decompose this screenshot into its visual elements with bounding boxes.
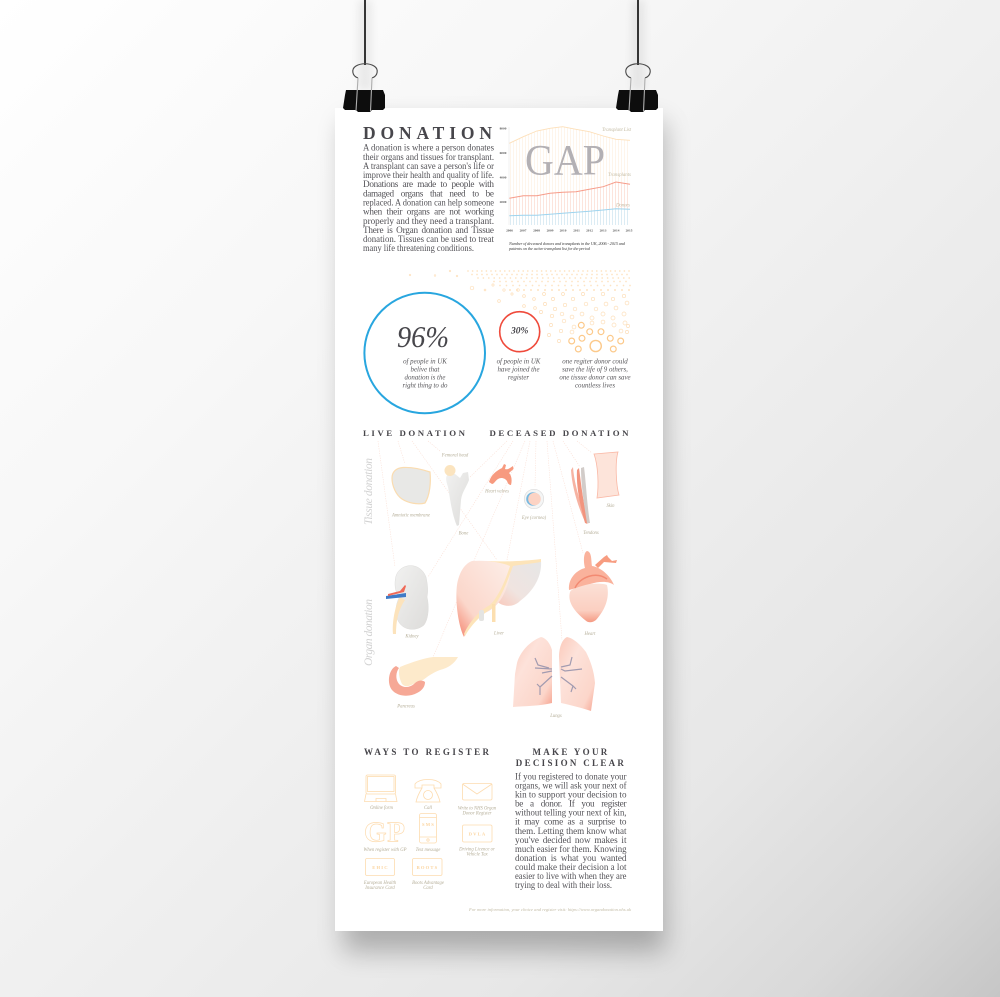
chart: gap between transplant list, transplants and donors: 2007 bbox=[520, 228, 527, 232]
heading: make your decision clear: DECISION CLEAR bbox=[516, 758, 626, 768]
chart: gap between transplant list, transplants and donors: 2008 bbox=[533, 228, 540, 232]
stat: donor saves lives text bbox=[559, 358, 631, 390]
text block: donation intro: A donation is where a person donates bbox=[363, 143, 494, 153]
text block: decision: donation is what you wanted bbox=[515, 853, 627, 863]
icon: write envelope: Write to NHS Organ bbox=[458, 806, 497, 812]
organ: bone and femoral head: Femoral head bbox=[441, 454, 469, 458]
text block: donation intro: when their organs are not working bbox=[363, 207, 494, 217]
text block: donation intro: properly and they need a transplant. bbox=[363, 216, 494, 226]
organ: lungs: Lungs bbox=[549, 714, 562, 719]
stat: 96 percent: of people in UK bbox=[403, 358, 447, 366]
chart: gap between transplant list, transplants and donors: 2000 bbox=[500, 200, 507, 204]
text block: decision: organs, we will ask your next of bbox=[515, 780, 627, 790]
organ: tendons: Tendons bbox=[583, 531, 599, 536]
organ: amniotic membrane bbox=[391, 467, 430, 518]
icon: text message mobile: Text message bbox=[416, 848, 440, 853]
text block: donation intro: A transplant can save a person's life or bbox=[363, 161, 494, 171]
stat: 30 percent bbox=[497, 312, 541, 382]
organ: pancreas: Pancreas bbox=[396, 704, 415, 710]
text block: decision: much easier for them. Knowing bbox=[515, 844, 627, 854]
poster sheet bbox=[335, 108, 663, 931]
icon: EHIC card: Insurance Card bbox=[364, 886, 395, 891]
organ: kidney: Kidney bbox=[404, 634, 420, 640]
organ: heart: Heart bbox=[584, 632, 596, 637]
poster shadow bbox=[343, 122, 665, 952]
icon: GP: GP bbox=[364, 816, 405, 848]
chart: gap between transplant list, transplants and donors: 2012 bbox=[586, 228, 593, 232]
organ: liver: Liver bbox=[493, 632, 504, 636]
icon: online form laptop bbox=[364, 775, 397, 811]
stat: 30 percent: of people in UK bbox=[497, 358, 541, 366]
chart: gap between transplant list, transplants and donors: 2013 bbox=[600, 228, 607, 232]
organ: skin bbox=[594, 452, 619, 509]
text block: donation intro: their organs and tissues for transplant. bbox=[363, 152, 494, 162]
chart: gap between transplant list, transplants and donors: 2009 bbox=[547, 228, 554, 232]
chart: gap between transplant list, transplants and donors: Donors bbox=[615, 204, 630, 208]
organ: eye cornea: Eye (cornea) bbox=[521, 516, 547, 521]
label: organ donation: Organ donation bbox=[363, 599, 375, 666]
stat: donor saves lives text: save the life of 9 others, bbox=[562, 366, 628, 374]
icon: write envelope: Donor Register bbox=[461, 812, 492, 816]
icon: call telephone bbox=[415, 780, 441, 811]
binder clip right bbox=[616, 0, 658, 112]
organ: kidney bbox=[386, 566, 428, 640]
heading: deceased donation: DECEASED DONATION bbox=[490, 428, 629, 438]
text block: decision: trying to deal with their loss. bbox=[515, 880, 612, 890]
heading: make your decision clear: MAKE YOUR bbox=[532, 747, 610, 757]
icon: text message mobile: SMS bbox=[422, 822, 435, 827]
icon: Boots card bbox=[412, 858, 444, 891]
icon: write envelope bbox=[458, 784, 497, 816]
text block: decision: kin to support your decision to bbox=[515, 790, 627, 800]
connector lines bbox=[378, 441, 592, 657]
chart: gap between transplant list, transplants and donors: 6000 bbox=[500, 151, 507, 155]
footer note: For more information, your choice and register visit: https://www.organdonation.nhs.uk bbox=[468, 907, 632, 913]
text block: donation intro: improve their health and quality of life. bbox=[363, 170, 494, 180]
text block: decision: without telling your next of kin, bbox=[515, 808, 626, 818]
organ: heart bbox=[569, 551, 617, 637]
stat: 96 percent bbox=[364, 293, 485, 413]
text block: donation intro: replaced. A donation can help someone bbox=[363, 198, 494, 208]
stat: donor saves lives text: one tissue donor can save bbox=[559, 374, 631, 382]
stat: 96 percent: belive that bbox=[411, 366, 441, 374]
label: tissue donation: Tissue donation bbox=[363, 458, 375, 525]
text block: donation intro: donation. Tissues can be used to treat bbox=[363, 234, 494, 244]
organ: pancreas bbox=[389, 657, 458, 710]
icon: text message mobile bbox=[416, 814, 440, 853]
heading: ways to register: WAYS TO REGISTER bbox=[364, 747, 490, 757]
icon: DVLA card: Vehicle Tax bbox=[466, 852, 489, 858]
icon: Boots card: Boots Advantage bbox=[412, 881, 444, 886]
rings: one donor saves nine others bbox=[569, 322, 624, 352]
chart: gap between transplant list, transplants and donors: 2006 bbox=[506, 228, 513, 232]
text block: decision bbox=[515, 772, 627, 890]
title: DONATION bbox=[363, 123, 492, 143]
icon: DVLA card: DVLA bbox=[469, 832, 486, 836]
text block: decision: you've decided now makes it bbox=[515, 835, 627, 845]
heading: live donation: LIVE DONATION bbox=[363, 428, 466, 438]
text block: donation intro: many life threatening conditions. bbox=[363, 243, 474, 253]
chart: gap between transplant list, transplants and donors bbox=[500, 126, 633, 232]
chart: gap between transplant list, transplants and donors: 4000 bbox=[500, 176, 507, 180]
organ: tendons bbox=[571, 467, 599, 536]
chart: gap between transplant list, transplants and donors: 8000 bbox=[500, 126, 507, 130]
icon: GP: When register with GP bbox=[364, 848, 407, 853]
organ: amniotic membrane: Amniotic membrane bbox=[391, 514, 430, 518]
text block: donation intro: Donations are made to people with bbox=[363, 179, 494, 189]
chart: gap between transplant list, transplants and donors: 2014 bbox=[613, 228, 620, 232]
stat: donor saves lives text: one regiter donor could bbox=[562, 358, 628, 366]
icon: DVLA card bbox=[458, 825, 495, 858]
text block: donation intro: There is Organ donation and Tissue bbox=[363, 225, 494, 235]
text block: donation intro: damaged organs that need to be bbox=[363, 188, 494, 198]
chart caption: patients on the active transplant list for the period bbox=[508, 246, 591, 251]
text block: decision: easier to live with when they are bbox=[515, 871, 626, 881]
chart: gap between transplant list, transplants and donors: 2011 bbox=[573, 228, 580, 232]
heading: make your decision clear bbox=[516, 747, 626, 768]
text block: decision: could make their decision a lot bbox=[515, 862, 627, 872]
chart: gap between transplant list, transplants and donors: GAP bbox=[525, 138, 605, 184]
text block: donation intro bbox=[363, 143, 494, 253]
chart caption: Number of deceased donors and transplants in the UK, 2006 - 2015 and bbox=[508, 241, 626, 247]
stat: 30 percent: have joined the bbox=[497, 366, 540, 374]
organ: bone and femoral head: Bone bbox=[459, 532, 468, 536]
organ: lungs bbox=[513, 637, 595, 719]
text block: decision: be a donor. If you register bbox=[515, 799, 626, 809]
icon: call telephone: Call bbox=[424, 806, 433, 811]
icon: DVLA card: Driving Licence or bbox=[458, 848, 495, 852]
organ: heart valves bbox=[484, 464, 514, 494]
chart: gap between transplant list, transplants and donors: 2015 bbox=[626, 228, 633, 232]
stat: 96 percent: right thing to do bbox=[403, 382, 448, 390]
organ: liver bbox=[456, 559, 541, 637]
stat: 96 percent: donation is the bbox=[405, 374, 445, 382]
text block: decision: If you registered to donate your bbox=[515, 772, 626, 782]
chart: gap between transplant list, transplants and donors: Transplants bbox=[608, 173, 631, 178]
text block: decision: them. Letting them know what bbox=[515, 826, 627, 836]
icon: Boots card: Card bbox=[423, 886, 433, 891]
chart: gap between transplant list, transplants and donors: 2010 bbox=[560, 228, 567, 232]
icon: EHIC card: European Health bbox=[363, 881, 397, 886]
stat: 30 percent: register bbox=[508, 374, 529, 382]
icon: EHIC card bbox=[363, 858, 397, 891]
stat: donor saves lives text: countless lives bbox=[575, 382, 615, 390]
icon: online form laptop: Online form bbox=[370, 806, 394, 811]
organ: heart valves: Heart valves bbox=[484, 490, 509, 494]
organ: skin: Skin bbox=[606, 504, 615, 509]
text block: decision: it may come as a surprise to bbox=[515, 817, 627, 827]
icon: EHIC card: EHIC bbox=[372, 865, 389, 870]
organ: bone and femoral head bbox=[441, 454, 469, 536]
stat: 30 percent: 30% bbox=[510, 326, 528, 336]
binder clip left bbox=[343, 0, 385, 112]
icon: Boots card: BOOTS bbox=[417, 865, 438, 870]
chart caption bbox=[508, 241, 626, 251]
chart: gap between transplant list, transplants and donors: Transplant List bbox=[602, 128, 632, 133]
stat: 96 percent: 96% bbox=[397, 319, 449, 354]
organ: eye cornea bbox=[521, 489, 547, 521]
dot field: lives saved bbox=[409, 270, 631, 343]
